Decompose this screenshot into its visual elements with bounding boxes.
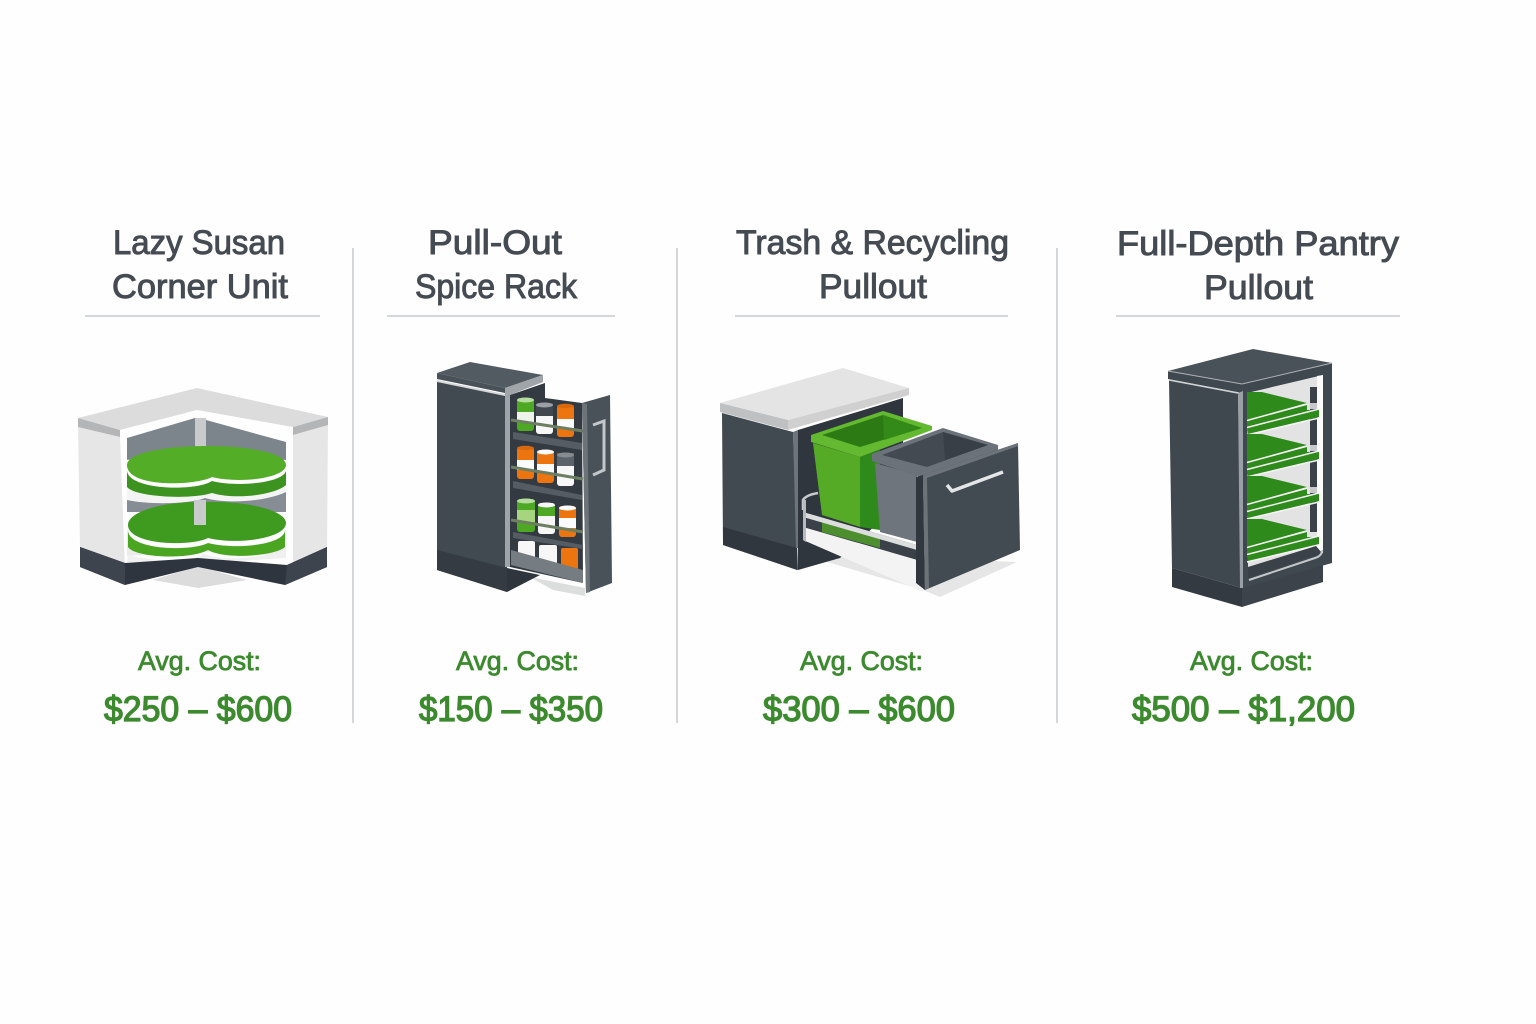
upper turntable — [127, 446, 286, 497]
upper shelf underside — [127, 484, 286, 503]
heading: spice rack: Spice Rack — [415, 268, 578, 306]
panel: pantry pullout — [1117, 225, 1399, 729]
icon: full-depth pantry cabinet — [1168, 349, 1332, 607]
drawer front — [916, 443, 1020, 590]
cost: lazy susan: $250 – $600 — [104, 690, 292, 729]
cost: pantry pullout — [1132, 646, 1355, 729]
slide rail — [803, 493, 923, 592]
cost: trash and recycling: $300 – $600 — [763, 690, 955, 729]
heading: spice rack: Pull-Out — [428, 224, 563, 262]
cost: spice rack: $150 – $350 — [419, 690, 603, 729]
cost: spice rack — [419, 646, 603, 729]
panel: trash and recycling — [720, 224, 1020, 729]
heading: trash and recycling — [736, 224, 1009, 306]
heading: pantry pullout: Pullout — [1204, 269, 1314, 307]
shelf 1 — [1247, 392, 1319, 435]
grey bin — [872, 428, 998, 542]
heading: lazy susan — [112, 224, 289, 306]
panel: lazy susan — [78, 224, 328, 729]
heading: pantry pullout — [1117, 225, 1399, 307]
shelves and rails — [511, 420, 583, 583]
cost: trash and recycling: Avg. Cost: — [800, 646, 923, 676]
shelf 3 — [1247, 476, 1319, 519]
cost: spice rack: Avg. Cost: — [456, 646, 579, 676]
cost: lazy susan — [104, 646, 292, 729]
lower turntable — [127, 502, 286, 563]
shelf 4 — [1247, 519, 1319, 562]
icon: lazy susan corner cabinet — [78, 388, 328, 588]
spice jars — [517, 398, 578, 570]
cost: pantry pullout: $500 – $1,200 — [1132, 690, 1355, 729]
heading: trash and recycling: Trash & Recycling — [736, 224, 1009, 262]
heading: lazy susan: Lazy Susan — [113, 224, 285, 262]
cost: lazy susan: Avg. Cost: — [138, 646, 261, 676]
panel: spice rack — [415, 224, 612, 729]
cost: pantry pullout: Avg. Cost: — [1190, 646, 1313, 676]
icon: trash and recycling pullout — [720, 368, 1020, 597]
heading: spice rack — [415, 224, 578, 306]
countertop — [720, 368, 909, 430]
shelf 2 — [1247, 434, 1319, 477]
heading: pantry pullout: Full-Depth Pantry — [1117, 225, 1399, 263]
green bin — [811, 411, 932, 530]
cost: trash and recycling — [763, 646, 955, 729]
heading: lazy susan: Corner Unit — [112, 268, 289, 306]
icon: pull-out spice rack — [437, 362, 612, 596]
heading: trash and recycling: Pullout — [819, 268, 928, 306]
